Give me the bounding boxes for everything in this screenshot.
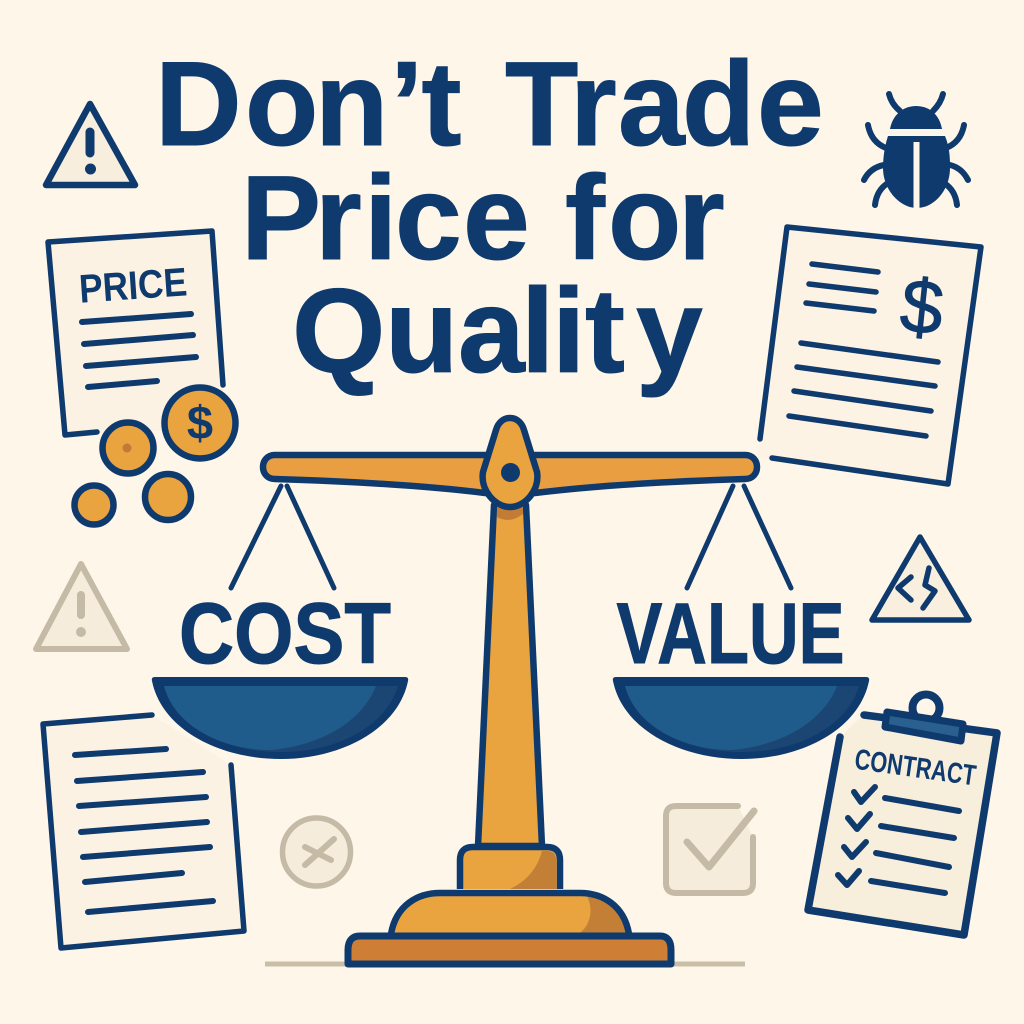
scale base dome	[391, 893, 629, 934]
icon: coins: $	[187, 396, 213, 449]
checklist ticks	[838, 787, 875, 885]
icon: faded check box	[666, 806, 754, 893]
dollar sign: $	[896, 263, 947, 352]
scale pivot	[483, 418, 537, 507]
post shadow	[497, 506, 523, 520]
price label: PRICE	[78, 260, 188, 312]
panel: contract clipboard	[808, 694, 997, 935]
label: value: VALUE	[616, 586, 844, 682]
scale strings	[231, 486, 791, 588]
illustration: balance scale	[231, 418, 791, 964]
clipboard board	[808, 715, 997, 935]
clipboard ring	[912, 694, 940, 722]
icon: coins	[74, 388, 236, 524]
panel: dollar document	[757, 227, 981, 484]
left scale pan	[152, 677, 408, 759]
right scale pan	[613, 677, 869, 759]
icon: faded x circle	[282, 818, 350, 886]
title: Don’t Trade	[155, 37, 824, 171]
panel: price document	[48, 231, 224, 435]
icon: faded warning triangle	[36, 564, 127, 649]
left document lines	[75, 749, 213, 912]
icon: code warning triangle	[872, 537, 969, 620]
scale beam	[263, 455, 757, 493]
contract label: CONTRACT	[853, 744, 978, 792]
title: Quality	[292, 264, 703, 398]
price text lines	[82, 314, 196, 387]
title: Price for	[241, 151, 725, 285]
clipboard clip	[885, 712, 963, 741]
icon: bug	[864, 94, 968, 209]
dollar document lines	[789, 264, 938, 436]
icon: warning triangle top left	[46, 104, 135, 185]
scale base plate	[348, 936, 671, 964]
scale post	[478, 505, 542, 846]
ground line	[265, 962, 745, 966]
scale base neck	[460, 847, 560, 889]
checklist lines	[871, 798, 959, 893]
label: cost: COST	[179, 586, 391, 682]
panel: left document	[43, 715, 244, 948]
title	[155, 37, 824, 398]
